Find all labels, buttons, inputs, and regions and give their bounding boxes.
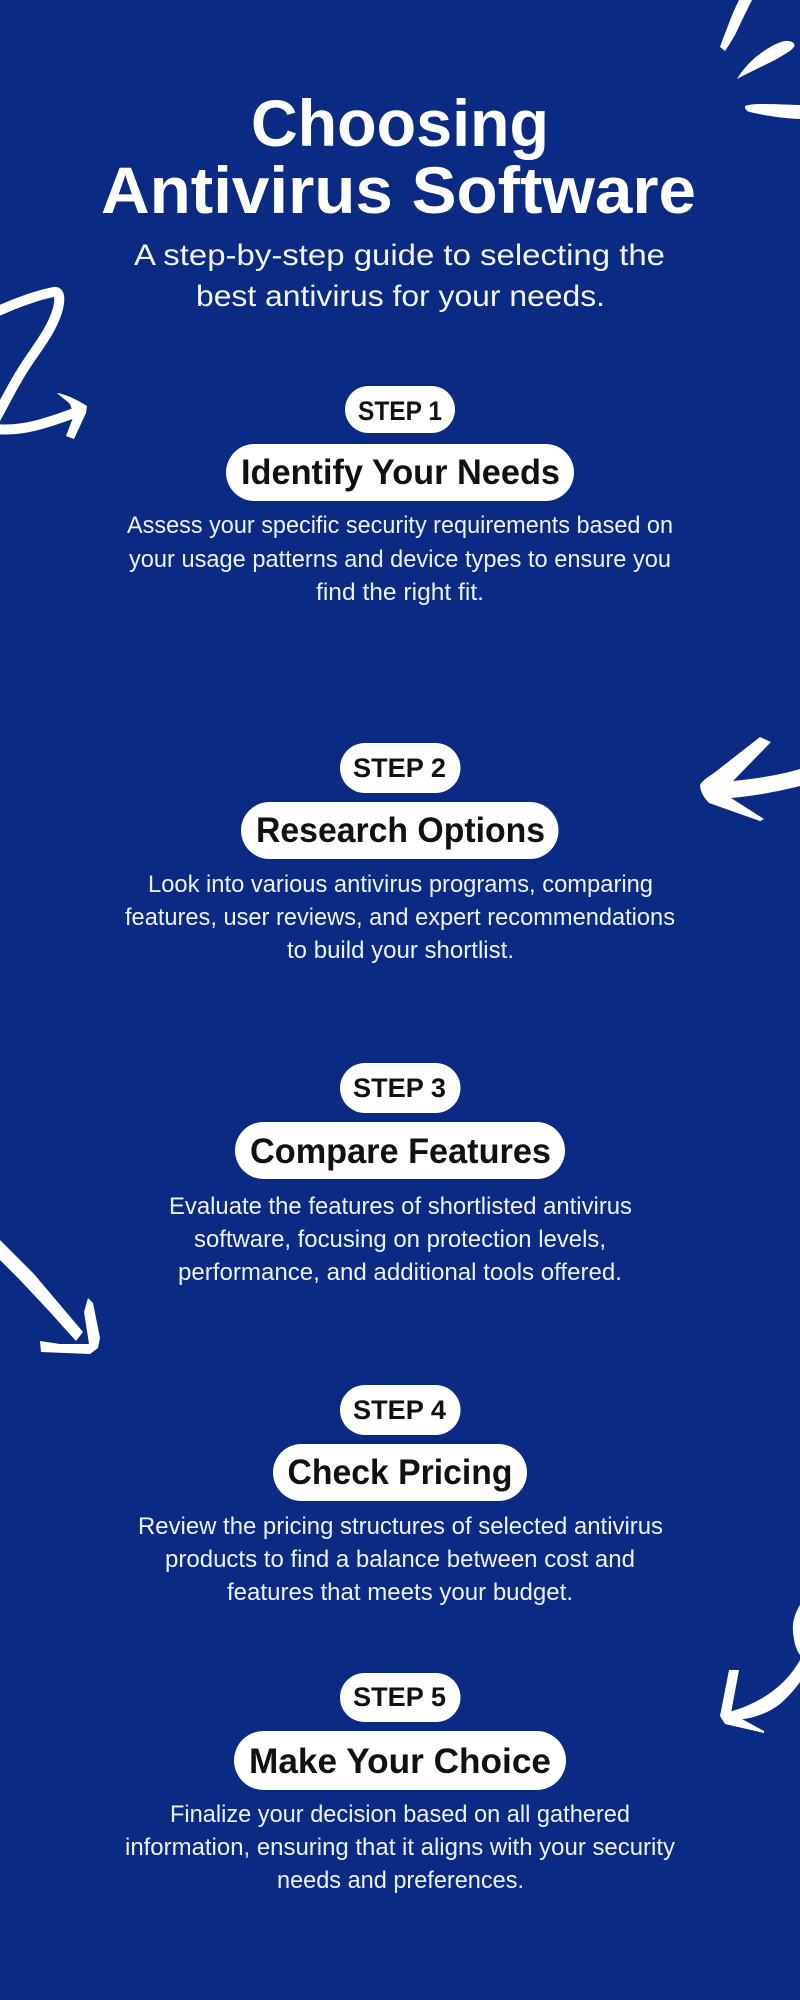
step 5 description <box>125 1801 675 1894</box>
step 4 heading: Check Pricing <box>288 1453 512 1492</box>
step 3 <box>169 1063 632 1286</box>
step 3 heading <box>235 1122 565 1179</box>
step 2 description: features, user reviews, and expert recommendations <box>125 904 675 931</box>
arrow: curved pointing down-left <box>720 1605 800 1733</box>
step 4 description: features that meets your budget. <box>227 1579 573 1606</box>
step 3 label: STEP 3 <box>353 1073 446 1103</box>
step 1 heading: Identify Your Needs <box>241 453 560 492</box>
step 2 label: STEP 2 <box>353 753 446 783</box>
step 1 <box>127 386 673 606</box>
step 2 label <box>340 743 460 793</box>
arrow: pointing down-right <box>0 1240 100 1354</box>
step 3 description: software, focusing on protection levels, <box>194 1226 606 1253</box>
step 5 heading: Make Your Choice <box>249 1742 551 1781</box>
step 2 heading: Research Options <box>256 811 545 850</box>
step 2 heading <box>241 802 558 859</box>
title: Choosing <box>251 86 549 160</box>
arrow: pointing left <box>700 737 800 821</box>
step 5 description: Finalize your decision based on all gathered <box>170 1801 630 1828</box>
step 2 <box>125 743 675 964</box>
subtitle <box>134 239 665 313</box>
step 1 description: Assess your specific security requirements based on <box>127 512 673 539</box>
step 4 <box>138 1385 663 1606</box>
step 5 label: STEP 5 <box>353 1682 446 1712</box>
step 5 heading <box>234 1731 566 1790</box>
step 3 description: Evaluate the features of shortlisted antivirus <box>169 1193 632 1220</box>
step 3 description: performance, and additional tools offered. <box>178 1259 622 1286</box>
step 2 description: Look into various antivirus programs, comparing <box>148 871 653 898</box>
step 1 description: find the right fit. <box>316 579 484 606</box>
step 2 description <box>125 871 675 964</box>
step 5 <box>125 1673 675 1894</box>
decoration: top-right brush strokes <box>720 0 800 119</box>
step 4 description <box>138 1513 663 1606</box>
step 3 heading: Compare Features <box>250 1132 551 1171</box>
step 4 description: Review the pricing structures of selected antivirus <box>138 1513 663 1540</box>
step 5 description: needs and preferences. <box>277 1867 524 1894</box>
step 4 heading <box>273 1444 527 1501</box>
step 1 description: your usage patterns and device types to ensure you <box>129 546 671 573</box>
step 4 label <box>340 1385 460 1435</box>
step 1 label: STEP 1 <box>358 396 442 426</box>
step 1 heading <box>226 444 574 501</box>
step 2 description: to build your shortlist. <box>287 937 514 964</box>
subtitle: best antivirus for your needs. <box>196 280 605 313</box>
step 3 description <box>169 1193 632 1286</box>
step 5 description: information, ensuring that it aligns with your security <box>125 1834 675 1861</box>
step 1 description <box>127 512 673 606</box>
subtitle: A step-by-step guide to selecting the <box>134 239 665 272</box>
step 3 label <box>340 1063 460 1113</box>
step 1 label <box>345 386 455 433</box>
title: Antivirus Software <box>101 153 696 227</box>
step 4 label: STEP 4 <box>353 1395 446 1425</box>
title <box>101 86 696 227</box>
step 5 label <box>340 1673 460 1722</box>
step 4 description: products to find a balance between cost and <box>165 1546 635 1573</box>
arrow: zigzag pointing right <box>0 292 87 439</box>
